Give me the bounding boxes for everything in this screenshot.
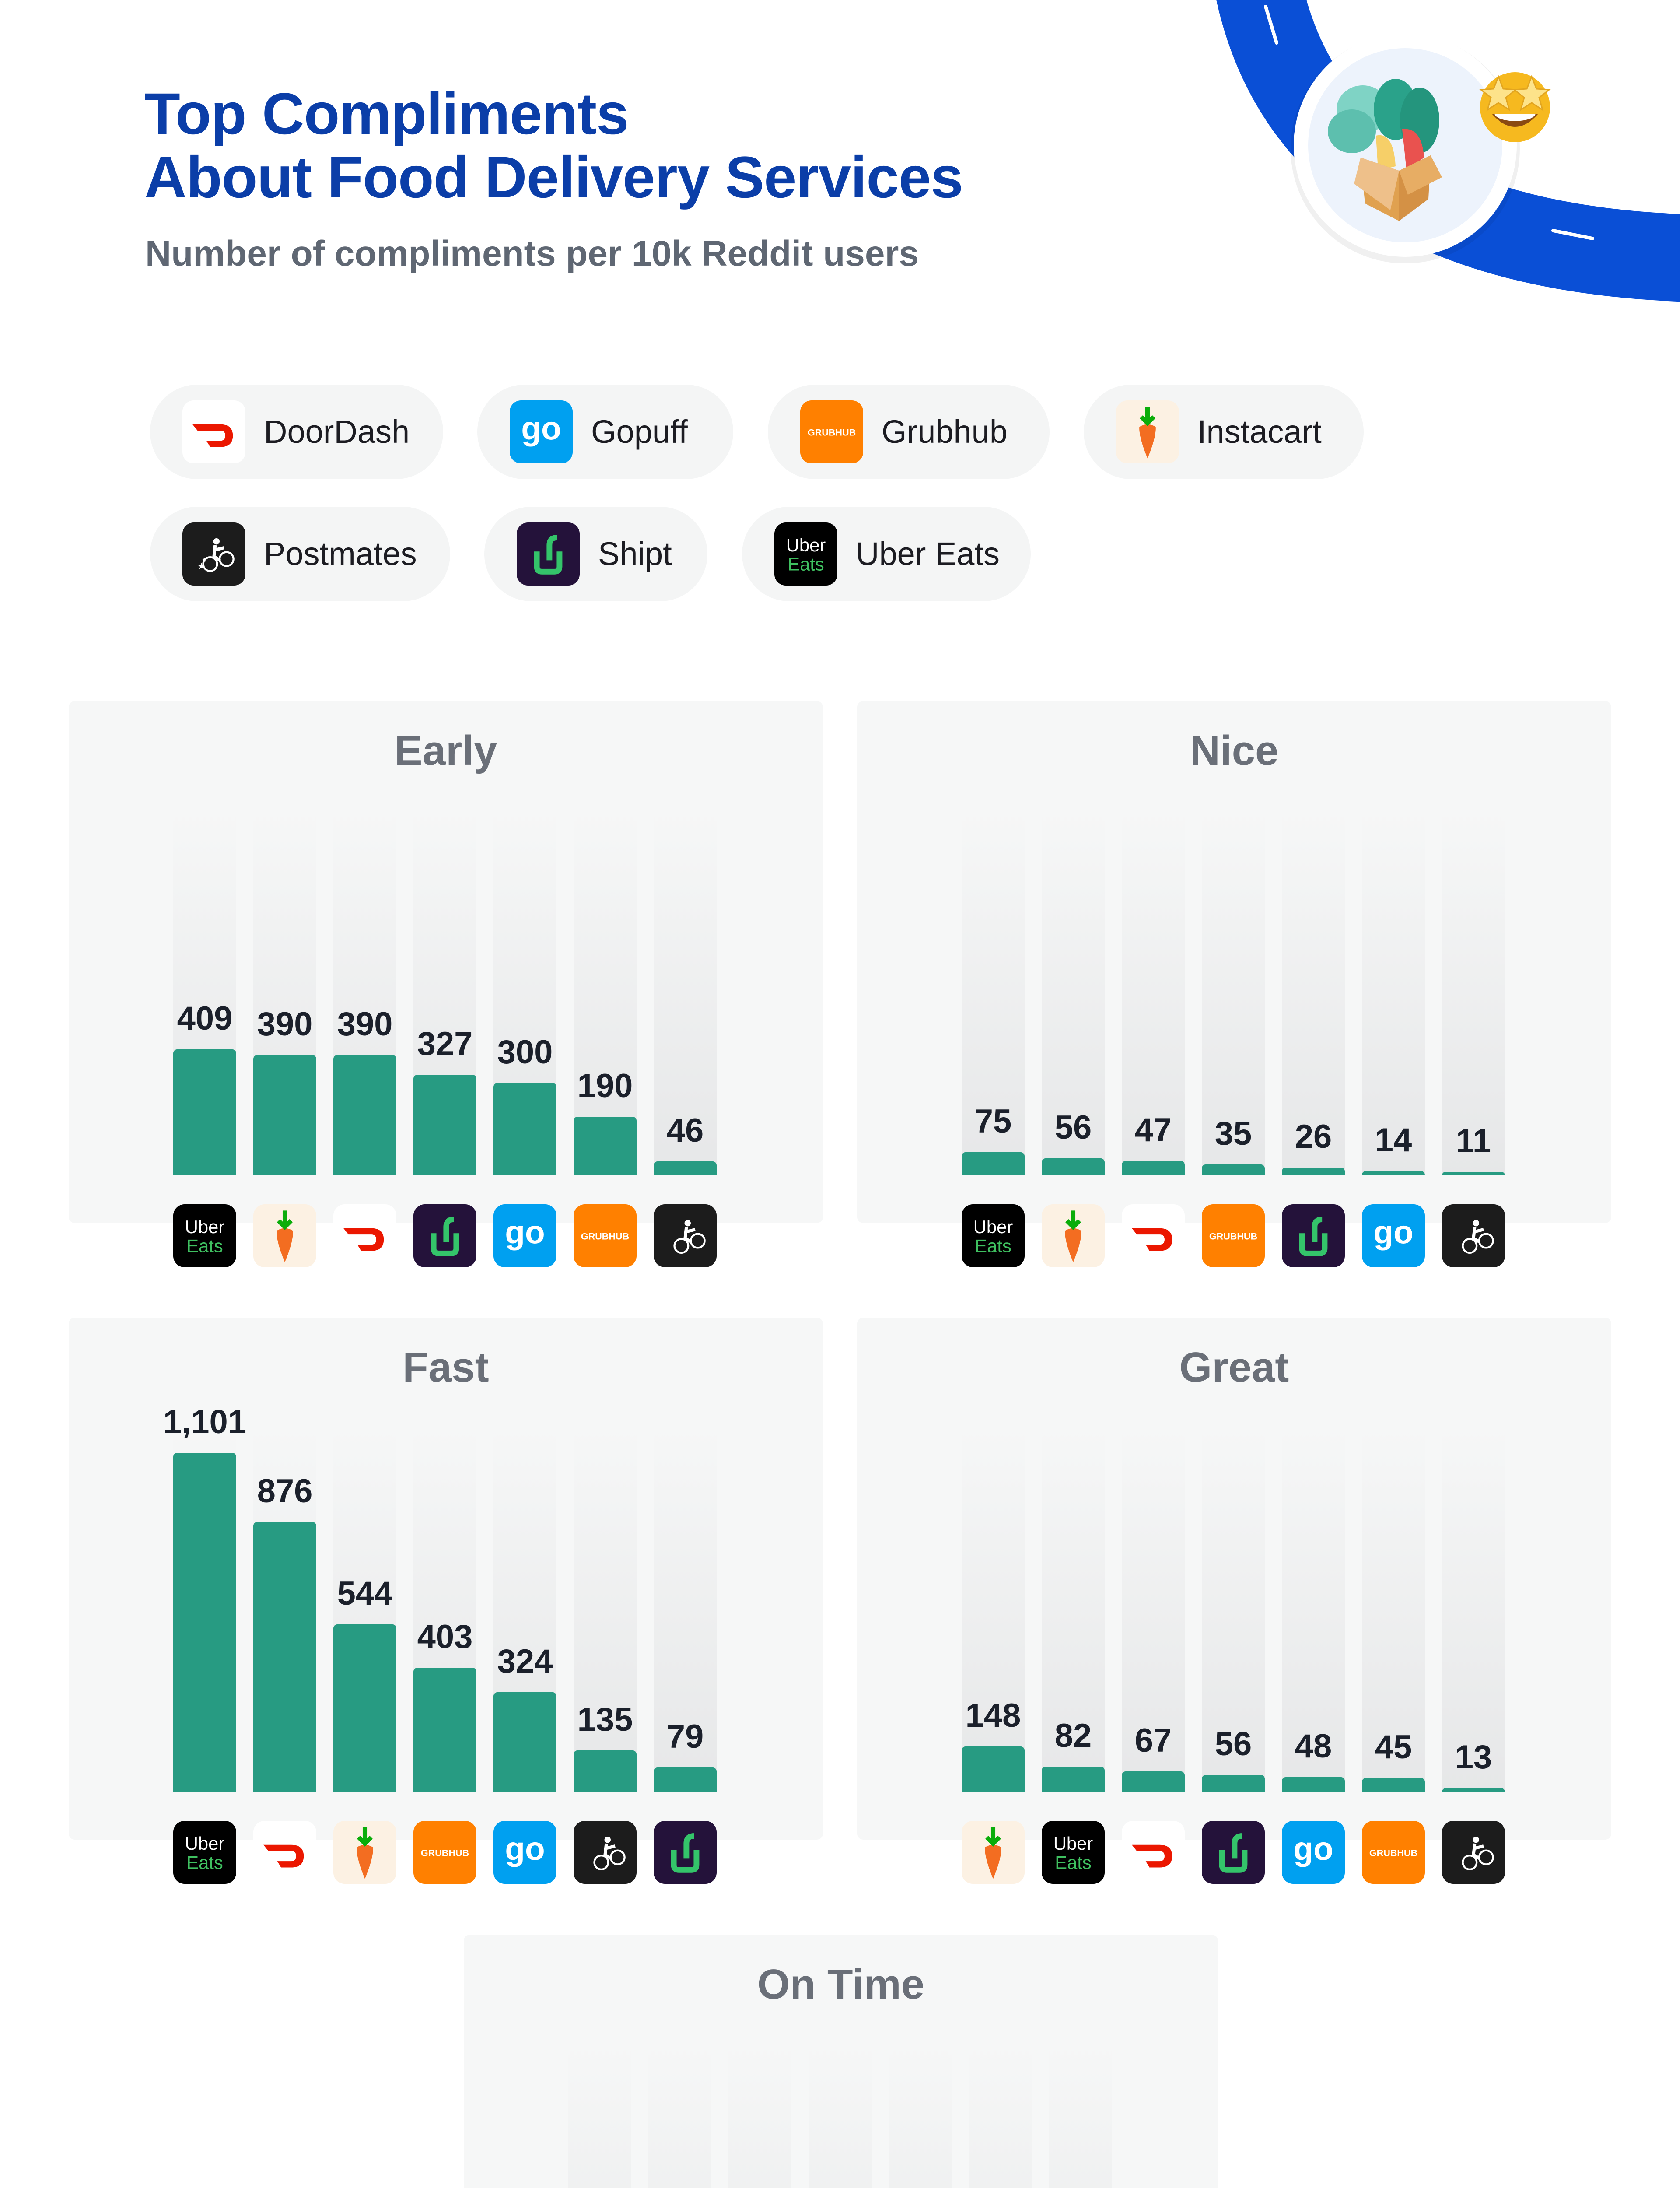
- legend: Uber Eats: [742, 507, 1031, 601]
- bar chart: Fast: 135: [578, 1701, 633, 1738]
- bar chart: Fast: 876: [257, 1473, 312, 1510]
- emoji: star-struck face: [1474, 63, 1556, 145]
- heading: Early: Early: [395, 727, 497, 774]
- illustration: road and box: [1138, 0, 1680, 333]
- heading: Nice: Nice: [1190, 727, 1278, 774]
- legend: DoorDash: [150, 385, 443, 479]
- legend: Grubhub: Grubhub: [882, 414, 1008, 450]
- bar chart: Fast: 1,101: [163, 1403, 246, 1441]
- icons: Fast: [173, 1821, 717, 1884]
- legend: Shipt: Shipt: [598, 536, 672, 572]
- bar chart: Nice: 11: [1456, 1122, 1491, 1160]
- icons: Early: go: [505, 1213, 545, 1250]
- bar chart: On Time: [568, 2005, 1112, 2188]
- bar chart: Early: [173, 771, 717, 1175]
- icons: Fast: go: [505, 1830, 545, 1867]
- bar chart: Nice: 35: [1215, 1115, 1252, 1152]
- legend: Instacart: Instacart: [1197, 414, 1322, 450]
- panel: Nice: [857, 701, 1611, 1223]
- title: Top Compliments: [144, 81, 629, 147]
- bar chart: Great: 56: [1215, 1725, 1252, 1763]
- bar chart: Early: 190: [578, 1067, 633, 1105]
- bar chart: Great: 45: [1375, 1729, 1412, 1766]
- panel: Fast: [69, 1318, 823, 1840]
- bar chart: Nice: 56: [1055, 1109, 1092, 1146]
- legend: Uber Eats: Uber Eats: [856, 536, 1000, 572]
- heading: Fast: Fast: [402, 1344, 489, 1391]
- icons: Fast: Eats: [186, 1852, 223, 1872]
- bar chart: Fast: 79: [667, 1718, 704, 1755]
- legend: Gopuff: [477, 385, 733, 479]
- panel: On Time: [464, 1935, 1218, 2188]
- legend: Grubhub: [768, 385, 1050, 479]
- legend: Postmates: [150, 507, 450, 601]
- bar chart: Fast: 544: [337, 1575, 392, 1612]
- icons: Early: [173, 1204, 717, 1267]
- legend: [150, 385, 1366, 602]
- legend: Postmates: ★: [201, 556, 207, 563]
- bar chart: Great: 67: [1135, 1722, 1172, 1759]
- bar chart: Great: [962, 1388, 1505, 1792]
- legend: DoorDash: DoorDash: [264, 414, 410, 450]
- bar chart: Early: 46: [667, 1112, 704, 1149]
- icons: Great: [962, 1821, 1505, 1884]
- panel: Great: [857, 1318, 1611, 1840]
- icons: Great: GRUBHUB: [1369, 1848, 1418, 1858]
- icons: Fast: GRUBHUB: [421, 1848, 469, 1858]
- icons: Early: Eats: [186, 1235, 223, 1256]
- bar chart: Fast: [173, 1388, 717, 1792]
- bar chart: Early: 390: [257, 1006, 312, 1043]
- bar chart: Early: 300: [497, 1034, 553, 1071]
- icons: Early: Uber: [185, 1217, 224, 1237]
- legend: Instacart: [1084, 385, 1364, 479]
- icons: Early: GRUBHUB: [581, 1231, 629, 1242]
- bar chart: Great: 148: [966, 1697, 1021, 1734]
- heading: On Time: On Time: [757, 1961, 924, 2008]
- panel: Early: [69, 701, 823, 1223]
- icons: Great: Uber: [1054, 1833, 1093, 1854]
- legend: Gopuff: Gopuff: [591, 414, 688, 450]
- legend: Uber Eats: Uber: [786, 535, 826, 555]
- bar chart: Nice: 75: [975, 1103, 1012, 1140]
- bar chart: Early: 327: [417, 1025, 472, 1062]
- icons: Nice: GRUBHUB: [1209, 1231, 1257, 1242]
- bar chart: Fast: 324: [497, 1643, 553, 1680]
- legend: Postmates: Postmates: [264, 536, 417, 572]
- legend: Gopuff: go: [521, 410, 561, 446]
- legend: Grubhub: GRUBHUB: [808, 427, 856, 438]
- bar chart: Fast: 403: [417, 1618, 472, 1655]
- bar chart: Nice: 26: [1295, 1118, 1332, 1155]
- bar chart: Nice: 47: [1135, 1112, 1172, 1149]
- legend: Shipt: [484, 507, 707, 601]
- heading: Great: Great: [1180, 1344, 1289, 1391]
- subtitle: Number of compliments per 10k Reddit users: [145, 234, 919, 274]
- bar chart: Great: 48: [1295, 1728, 1332, 1765]
- icons: Nice: [962, 1204, 1505, 1267]
- icons: Great: go: [1293, 1830, 1334, 1867]
- title: About Food Delivery Services: [144, 145, 963, 210]
- bar chart: Great: 82: [1055, 1717, 1092, 1754]
- legend: Postmates: ★: [198, 562, 206, 572]
- bar chart: Nice: 14: [1375, 1122, 1412, 1159]
- icons: Nice: Uber: [973, 1217, 1013, 1237]
- icons: Nice: Eats: [975, 1235, 1012, 1256]
- bar chart: Early: 390: [337, 1006, 392, 1043]
- icons: Fast: Uber: [185, 1833, 224, 1854]
- bar chart: Great: 13: [1455, 1739, 1492, 1776]
- legend: Uber Eats: Eats: [788, 554, 824, 574]
- title: [144, 82, 1107, 209]
- bar chart: Nice: [962, 771, 1505, 1175]
- icons: Great: Eats: [1055, 1852, 1092, 1872]
- icons: Nice: go: [1373, 1213, 1414, 1250]
- bar chart: Early: 409: [177, 1000, 232, 1037]
